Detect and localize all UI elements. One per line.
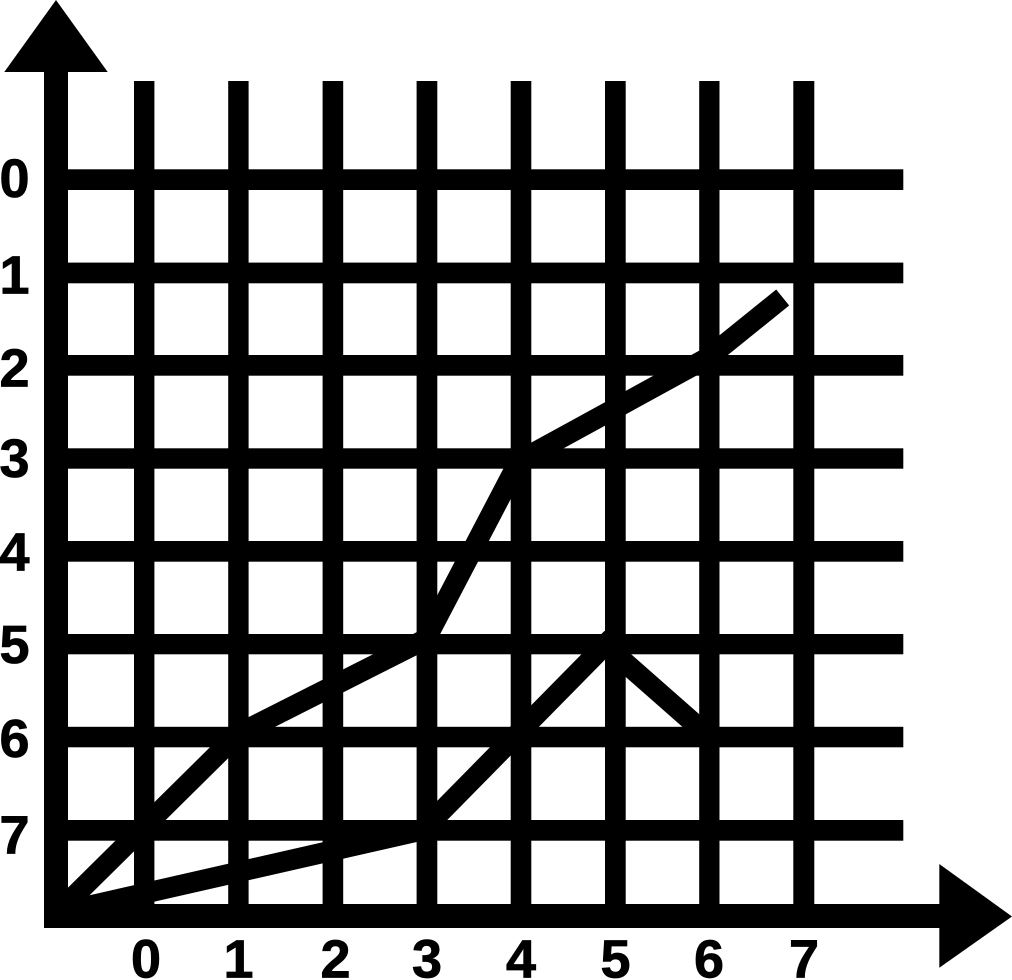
- y axis labels: 5: [0, 615, 30, 675]
- y axis labels: 7: [0, 806, 30, 866]
- y axis labels: 3: [0, 429, 30, 489]
- data line: lower series: [58, 645, 705, 913]
- y axis labels: 1: [0, 246, 30, 306]
- data line: upper series: [58, 298, 783, 912]
- x axis with arrow: [44, 864, 1012, 968]
- grid: horizontal lines: [50, 169, 903, 841]
- y axis labels: 4: [0, 523, 30, 583]
- x axis labels: [131, 930, 819, 980]
- y axis labels: 6: [0, 709, 30, 769]
- y axis labels: [0, 149, 30, 866]
- y axis with arrow: [4, 0, 108, 928]
- y axis labels: 0: [0, 149, 30, 209]
- grid: vertical lines: [134, 81, 814, 911]
- y axis labels: 2: [0, 339, 30, 399]
